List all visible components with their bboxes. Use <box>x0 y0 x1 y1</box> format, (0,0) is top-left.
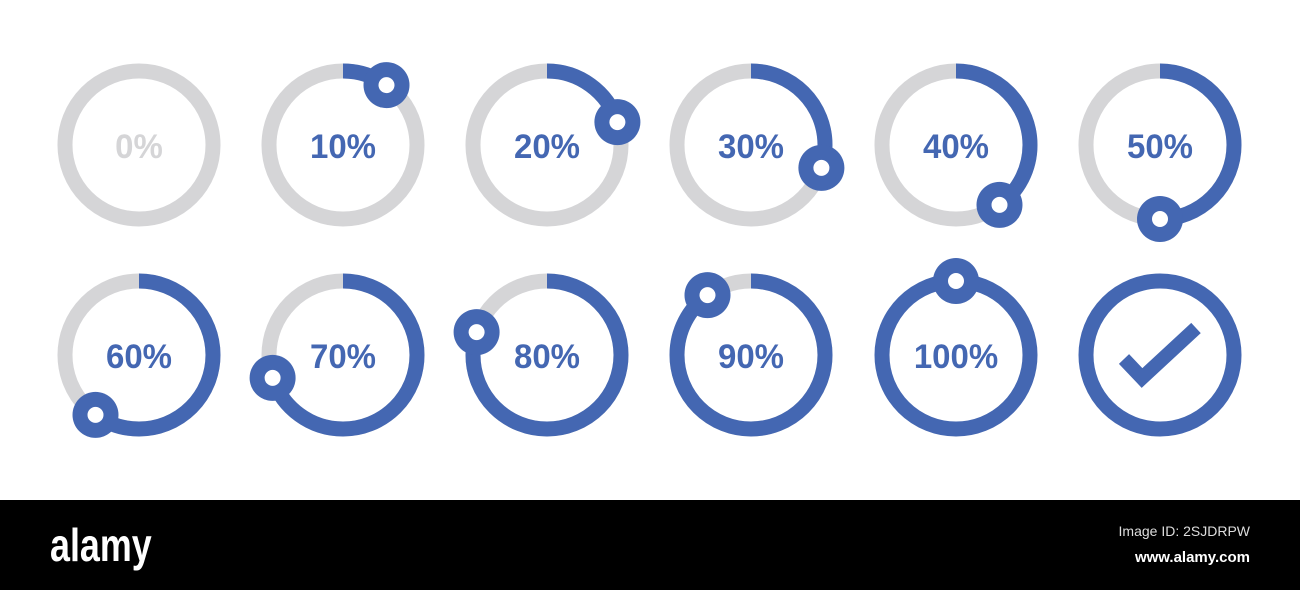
ring: 70%: 70% <box>310 339 376 376</box>
ring: 20% <box>473 71 640 219</box>
ring: 20%: 20% <box>514 129 580 166</box>
footer url: www.alamy.com <box>1134 549 1250 566</box>
ring: 40% <box>882 71 1030 228</box>
ring: 10% <box>269 62 417 219</box>
ring: 10%: 10% <box>310 129 376 166</box>
ring: 90% <box>677 272 825 429</box>
ring: 100%: 100% <box>914 339 998 376</box>
ring: 40%: 40% <box>923 129 989 166</box>
ring: 100% <box>882 258 1030 429</box>
ring: checkmark complete <box>1086 281 1234 429</box>
ring: 30%: 30% <box>718 129 784 166</box>
ring: 0% <box>65 71 213 219</box>
footer image id: Image ID: 2SJDRPW <box>1119 523 1251 539</box>
ring: 80% <box>454 281 621 429</box>
ring: 50%: 50% <box>1127 129 1193 166</box>
ring: 80%: 80% <box>514 339 580 376</box>
footer logo: alamy <box>50 520 152 571</box>
footer bar <box>0 500 1300 590</box>
ring: 60% <box>65 281 213 438</box>
ring: 70% <box>250 281 417 429</box>
ring: 0%: 0% <box>115 129 163 166</box>
ring: 90%: 90% <box>718 339 784 376</box>
ring: 50% <box>1086 71 1234 242</box>
ring: 60%: 60% <box>106 339 172 376</box>
ring: 30% <box>677 71 844 219</box>
